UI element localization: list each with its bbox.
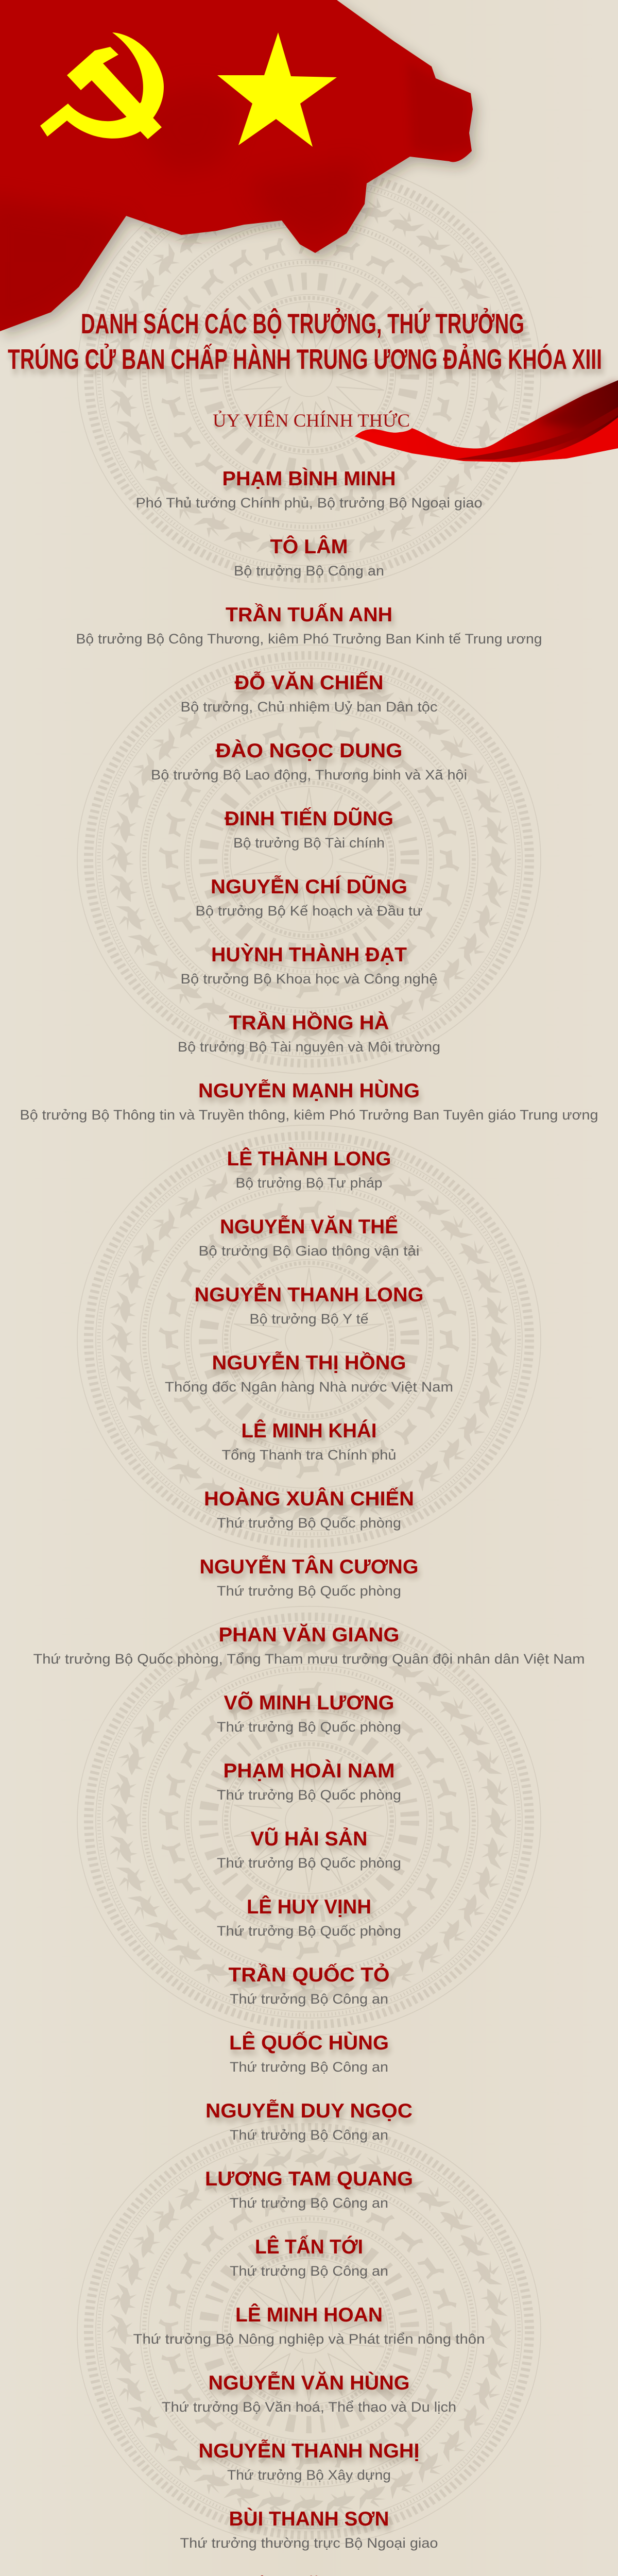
entry: Nguyễn Thanh Long xyxy=(195,1283,423,1327)
entry: Lê Minh Hoan: LÊ MINH HOAN xyxy=(235,2303,383,2326)
entry: Trần Tuấn Anh xyxy=(76,603,542,647)
entry: Bùi Thanh Sơn xyxy=(180,2507,438,2551)
entry: Nguyễn Văn Thể xyxy=(199,1215,419,1259)
entry: Trần Quốc Tỏ: Thứ trưởng Bộ Công an xyxy=(230,1991,388,2007)
entry: Vũ Hải Sản: Thứ trưởng Bộ Quốc phòng xyxy=(217,1855,401,1871)
entry: Nguyễn Văn Thể: NGUYỄN VĂN THỂ xyxy=(220,1215,398,1238)
entry: Đào Ngọc Dung: ĐÀO NGỌC DUNG xyxy=(215,739,403,762)
entry: Tô Lâm xyxy=(234,535,384,579)
title xyxy=(8,308,602,375)
entry: Phạm Bình Minh: Phó Thủ tướng Chính phủ, Bộ trưởng Bộ Ngoại giao xyxy=(136,495,482,511)
entry: Lê Quốc Hùng xyxy=(229,2031,389,2075)
bronze drum watermark column xyxy=(77,160,541,2576)
entry: Phạm Hoài Nam: PHẠM HOÀI NAM xyxy=(224,1759,394,1782)
entry: Nguyễn Chí Dũng xyxy=(196,875,422,919)
entry: Phan Văn Giang xyxy=(33,1623,585,1667)
entry: Nguyễn Văn Hùng xyxy=(162,2371,456,2415)
entry: Trần Quốc Tỏ xyxy=(229,1963,389,2007)
entry: Bùi Thanh Sơn: Thứ trưởng thường trực Bộ Ngoại giao xyxy=(180,2535,438,2551)
entry: Lê Tấn Tới: Thứ trưởng Bộ Công an xyxy=(230,2263,388,2279)
entry: Đỗ Văn Chiến: Bộ trưởng, Chủ nhiệm Uỷ ban Dân tộc xyxy=(180,699,438,715)
entry: Phạm Bình Minh xyxy=(136,467,482,511)
entry: Đỗ Văn Chiến: ĐỖ VĂN CHIẾN xyxy=(235,671,383,694)
entry: Hoàng Xuân Chiến: Thứ trưởng Bộ Quốc phòng xyxy=(217,1515,401,1531)
entry: Lê Minh Khái: LÊ MINH KHÁI xyxy=(241,1419,377,1442)
icon: hammer and sickle xyxy=(40,32,164,139)
entry: Phan Văn Giang: PHAN VĂN GIANG xyxy=(218,1623,400,1646)
entry: Nguyễn Văn Hùng: NGUYỄN VĂN HÙNG xyxy=(208,2371,410,2394)
entry: Lương Tam Quang: Thứ trưởng Bộ Công an xyxy=(230,2195,388,2211)
icon: yellow star xyxy=(217,32,337,147)
entry: Lê Huy Vịnh: LÊ HUY VỊNH xyxy=(247,1895,371,1918)
entry: Nguyễn Tân Cương xyxy=(200,1555,418,1599)
entry: Tô Lâm: TÔ LÂM xyxy=(270,535,348,558)
entry: Nguyễn Duy Ngọc: Thứ trưởng Bộ Công an xyxy=(230,2127,388,2143)
entry: Nguyễn Mạnh Hùng: NGUYỄN MẠNH HÙNG xyxy=(198,1079,420,1102)
entry: Đinh Tiến Dũng: ĐINH TIẾN DŨNG xyxy=(225,807,393,830)
entry: Nguyễn Văn Hùng: Thứ trưởng Bộ Văn hoá, Thể thao và Du lịch xyxy=(162,2399,456,2415)
entry: Lê Minh Hoan xyxy=(133,2303,485,2347)
entry: Đào Ngọc Dung: Bộ trưởng Bộ Lao động, Thương binh và Xã hội xyxy=(151,767,467,783)
entry: Trần Văn Sơn xyxy=(141,2575,477,2576)
entry: Trần Hồng Hà xyxy=(178,1011,440,1055)
ribbon: upper right xyxy=(355,380,618,462)
entry: Phạm Hoài Nam: Thứ trưởng Bộ Quốc phòng xyxy=(217,1787,401,1803)
entry: Đinh Tiến Dũng xyxy=(225,807,393,851)
entry: Lê Quốc Hùng: LÊ QUỐC HÙNG xyxy=(229,2031,389,2054)
entry: Vũ Hải Sản: VŨ HẢI SẢN xyxy=(250,1827,368,1850)
entry: Nguyễn Thị Hồng: NGUYỄN THỊ HỒNG xyxy=(212,1351,406,1374)
entry: Lê Quốc Hùng: Thứ trưởng Bộ Công an xyxy=(230,2059,388,2075)
section heading: official members: ỦY VIÊN CHÍNH THỨC xyxy=(213,410,410,431)
entry: Hoàng Xuân Chiến: HOÀNG XUÂN CHIẾN xyxy=(204,1487,414,1510)
entry: Nguyễn Thanh Nghị xyxy=(199,2439,419,2483)
entry: Đào Ngọc Dung xyxy=(151,739,467,783)
entry: Huỳnh Thành Đạt xyxy=(180,943,438,987)
entry: Huỳnh Thành Đạt: Bộ trưởng Bộ Khoa học và Công nghệ xyxy=(180,971,438,987)
entry: Lê Thành Long: Bộ trưởng Bộ Tư pháp xyxy=(236,1175,382,1191)
entry: Nguyễn Thị Hồng: Thống đốc Ngân hàng Nhà nước Việt Nam xyxy=(165,1379,453,1395)
entry: Nguyễn Thanh Long: Bộ trưởng Bộ Y tế xyxy=(249,1311,369,1327)
entry: Nguyễn Thanh Long: NGUYỄN THANH LONG xyxy=(195,1283,423,1306)
entry: Nguyễn Chí Dũng: NGUYỄN CHÍ DŨNG xyxy=(211,875,407,898)
entry: Vũ Hải Sản xyxy=(217,1827,401,1871)
entry: Nguyễn Mạnh Hùng: Bộ trưởng Bộ Thông tin và Truyền thông, kiêm Phó Trưởng Ban Tuyên giáo Trung ương xyxy=(20,1107,598,1123)
entry: Nguyễn Mạnh Hùng xyxy=(20,1079,598,1123)
entry: Võ Minh Lương: VÕ MINH LƯƠNG xyxy=(224,1691,394,1714)
entry: Nguyễn Thanh Nghị: Thứ trưởng Bộ Xây dựng xyxy=(227,2467,391,2483)
entry: Nguyễn Thanh Nghị: NGUYỄN THANH NGHỊ xyxy=(199,2439,419,2462)
red flag xyxy=(0,0,473,340)
entry: Lê Minh Khái: Tổng Thanh tra Chính phủ xyxy=(221,1447,397,1463)
entry: Phạm Bình Minh: PHẠM BÌNH MINH xyxy=(222,467,396,490)
entry: Trần Tuấn Anh: Bộ trưởng Bộ Công Thương, kiêm Phó Trưởng Ban Kinh tế Trung ương xyxy=(76,631,542,647)
entry: Lê Thành Long xyxy=(227,1147,391,1191)
entry: Lương Tam Quang xyxy=(205,2168,413,2211)
entry: Võ Minh Lương xyxy=(217,1691,401,1735)
entry: Nguyễn Chí Dũng: Bộ trưởng Bộ Kế hoạch và Đầu tư xyxy=(196,903,422,919)
entry: Lê Minh Hoan: Thứ trưởng Bộ Nông nghiệp và Phát triển nông thôn xyxy=(133,2331,485,2347)
entry: Bùi Thanh Sơn: BÙI THANH SƠN xyxy=(229,2507,389,2530)
entry: Phan Văn Giang: Thứ trưởng Bộ Quốc phòng, Tổng Tham mưu trưởng Quân đội nhân dân Việt Nam xyxy=(33,1651,585,1667)
entry: Trần Hồng Hà: TRẦN HỒNG HÀ xyxy=(229,1011,389,1034)
entry: Nguyễn Thị Hồng xyxy=(165,1351,453,1395)
entry: Đỗ Văn Chiến xyxy=(180,671,438,715)
entry: Huỳnh Thành Đạt: HUỲNH THÀNH ĐẠT xyxy=(211,943,407,966)
entry: Nguyễn Tân Cương: NGUYỄN TÂN CƯƠNG xyxy=(200,1555,418,1578)
entry: Lương Tam Quang: LƯƠNG TAM QUANG xyxy=(205,2168,413,2190)
entry: Đinh Tiến Dũng: Bộ trưởng Bộ Tài chính xyxy=(233,835,385,851)
entry: Phạm Hoài Nam xyxy=(217,1759,401,1803)
entry: Nguyễn Tân Cương: Thứ trưởng Bộ Quốc phòng xyxy=(217,1583,401,1599)
entry: Lê Tấn Tới xyxy=(230,2235,388,2279)
entry: Nguyễn Văn Thể: Bộ trưởng Bộ Giao thông vận tải xyxy=(199,1243,419,1259)
entry: Trần Tuấn Anh: TRẦN TUẤN ANH xyxy=(226,603,392,626)
entry: Nguyễn Duy Ngọc: NGUYỄN DUY NGỌC xyxy=(205,2099,413,2122)
entry: Võ Minh Lương: Thứ trưởng Bộ Quốc phòng xyxy=(217,1719,401,1735)
entry: Lê Minh Khái xyxy=(221,1419,397,1463)
entry: Lê Huy Vịnh xyxy=(217,1895,401,1939)
entry: Tô Lâm: Bộ trưởng Bộ Công an xyxy=(234,563,384,579)
entry: Trần Quốc Tỏ: TRẦN QUỐC TỎ xyxy=(229,1963,389,1986)
entry: Trần Hồng Hà: Bộ trưởng Bộ Tài nguyên và Môi trường xyxy=(178,1039,440,1055)
entry: Lê Thành Long: LÊ THÀNH LONG xyxy=(227,1147,391,1170)
entry: Lê Huy Vịnh: Thứ trưởng Bộ Quốc phòng xyxy=(217,1923,401,1939)
entry: Lê Tấn Tới: LÊ TẤN TỚI xyxy=(255,2235,363,2258)
entry: Hoàng Xuân Chiến xyxy=(204,1487,414,1531)
entry: Nguyễn Duy Ngọc xyxy=(205,2099,413,2143)
